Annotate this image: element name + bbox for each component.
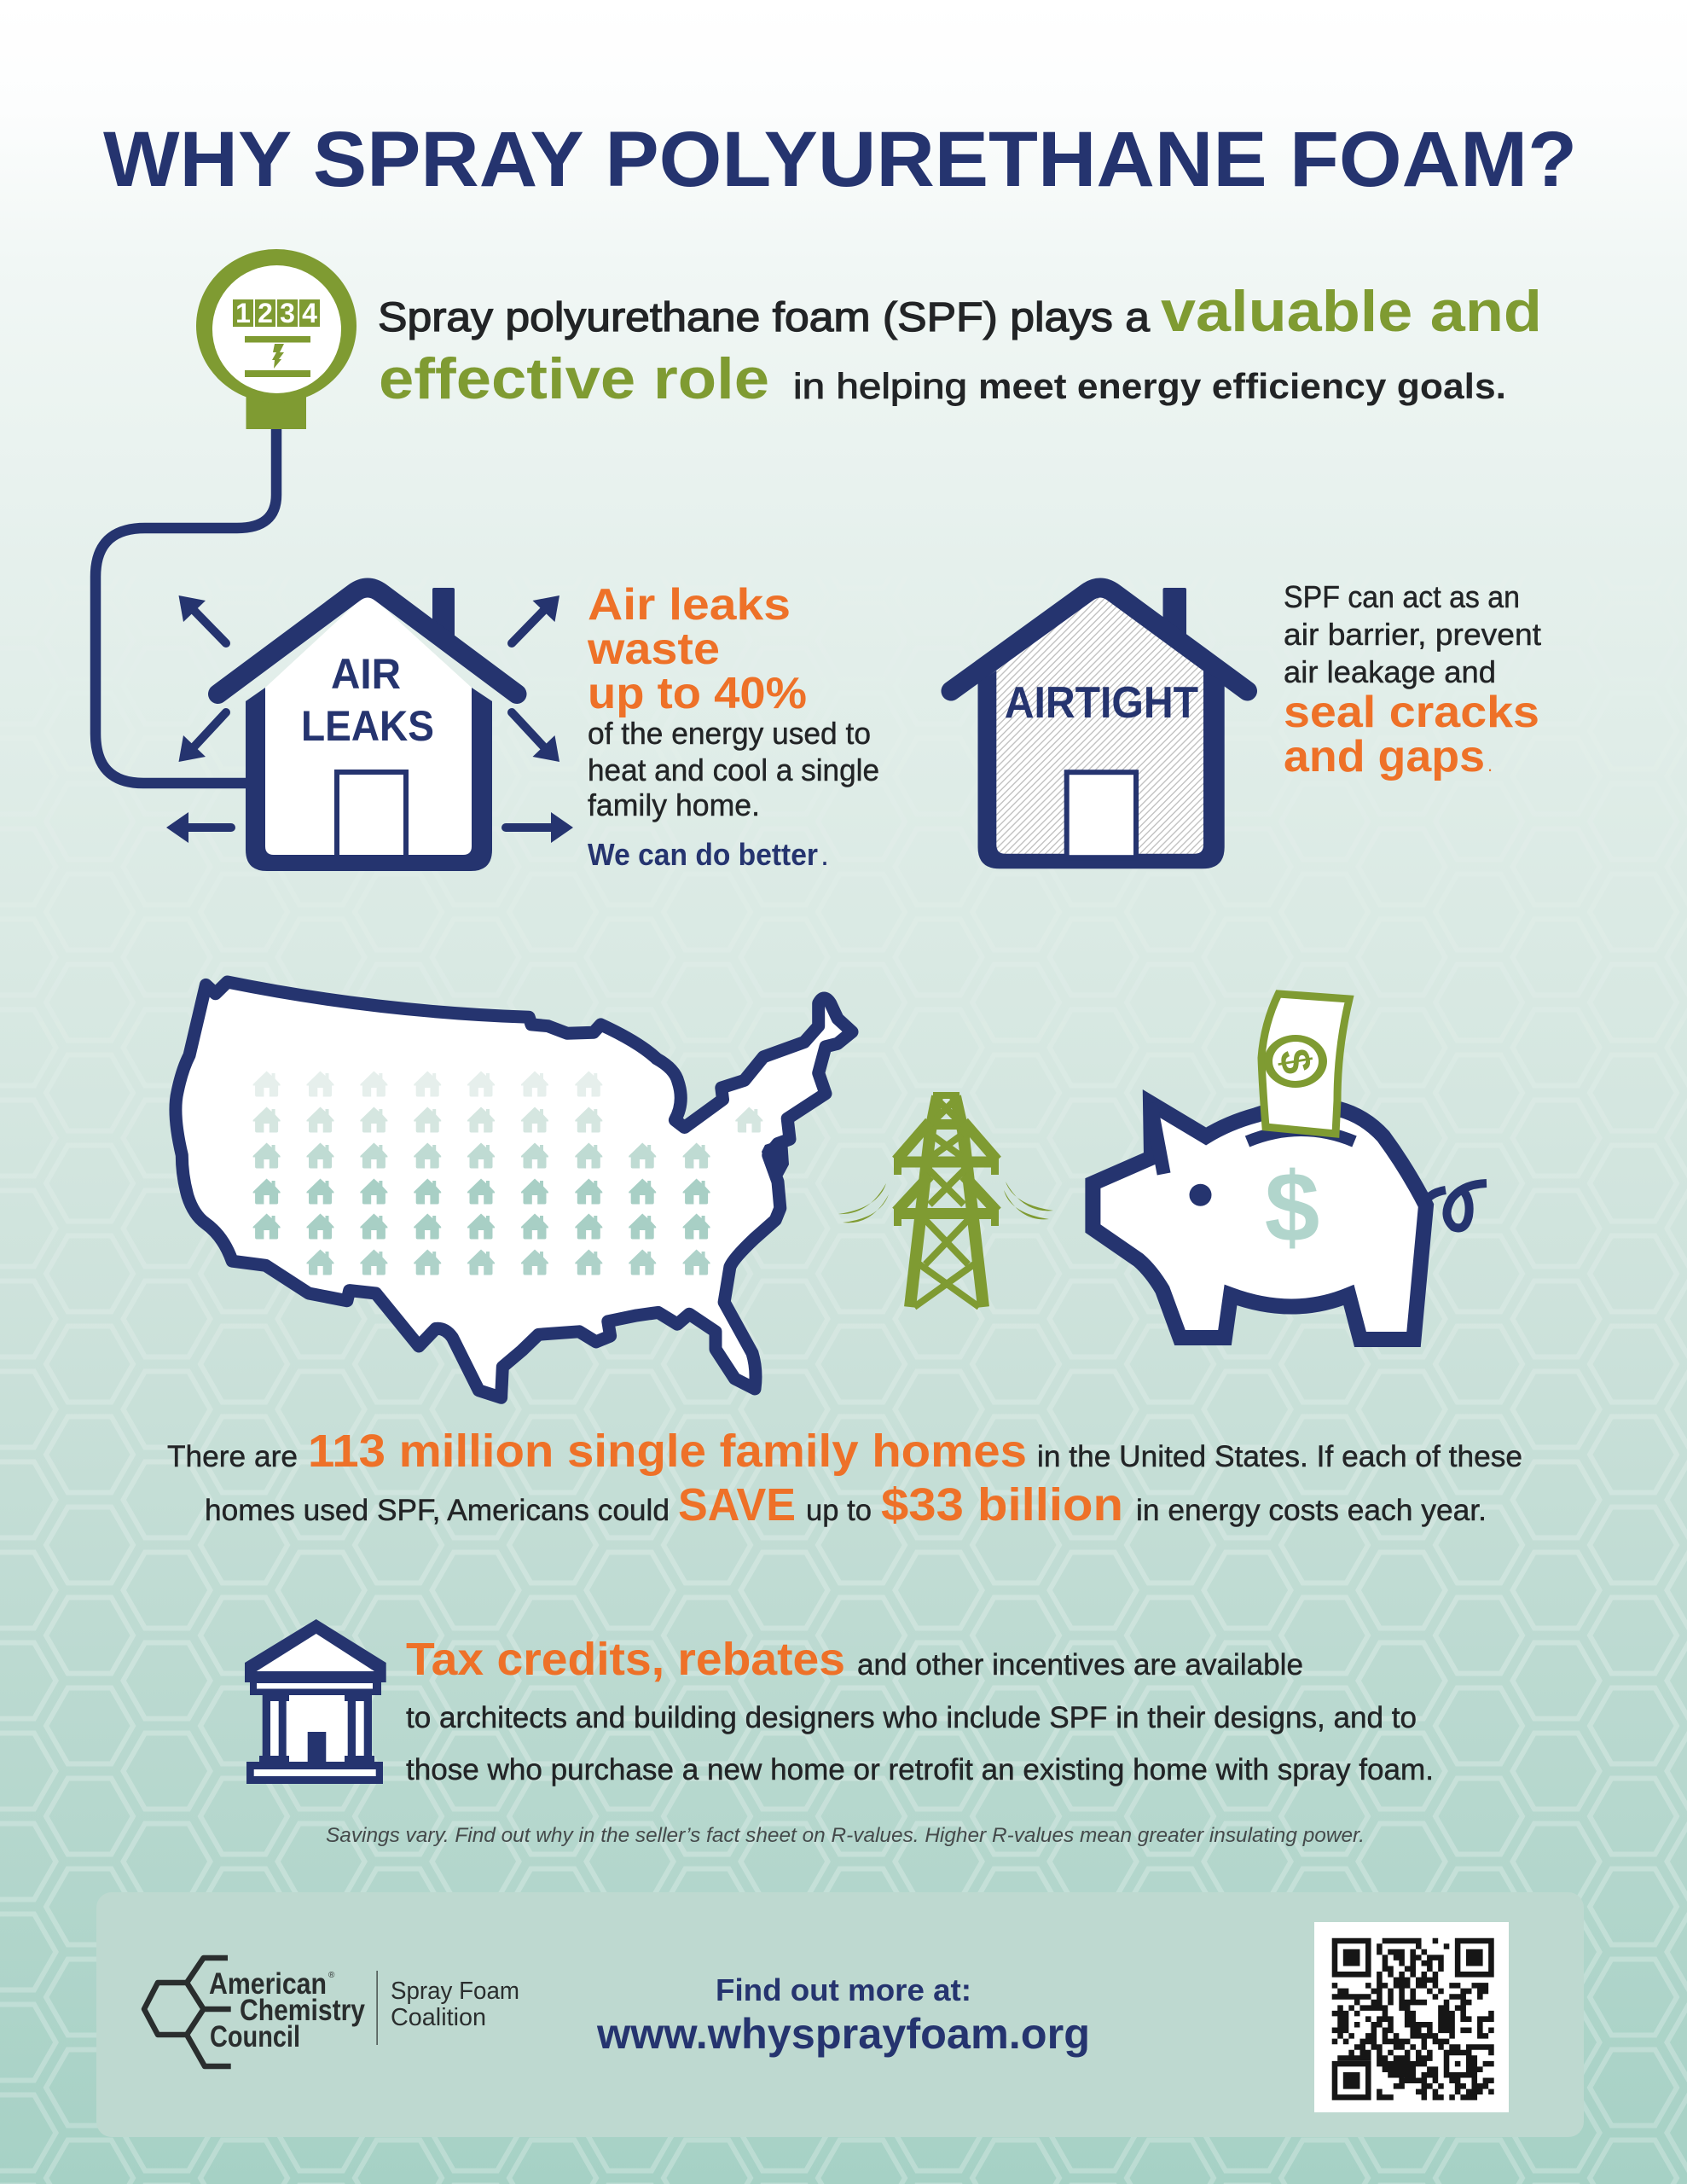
tax credits text: those who purchase a new home or retrofit an existing home with spray foam. — [406, 1753, 1434, 1786]
air leaks text — [587, 580, 879, 872]
homes and savings statement: $33 billion — [881, 1479, 1123, 1531]
air leaks text: We can do better — [588, 837, 818, 872]
homes and savings statement — [167, 1426, 1522, 1531]
airtight text: seal cracks — [1284, 688, 1539, 737]
homes and savings statement: SAVE — [678, 1479, 796, 1531]
website call to action: Find out more at: — [716, 1972, 971, 2007]
panel: footer — [96, 1892, 1584, 2137]
QR code — [1314, 1922, 1509, 2112]
intro text: meet energy efficiency goals. — [978, 366, 1506, 406]
air leaks text: family home. — [588, 787, 760, 822]
homes and savings statement: There are — [167, 1440, 298, 1473]
homes and savings statement: 113 million single family homes — [308, 1426, 1027, 1477]
icon: piggy bank: $ — [1265, 1152, 1319, 1263]
logo: American Chemistry Council: Spray Foam — [391, 1978, 519, 2005]
logo: American Chemistry Council — [144, 1958, 519, 2066]
icon: government building — [245, 1619, 386, 1784]
intro text: valuable and — [1161, 279, 1542, 344]
homes and savings statement: in the United States. If each of these — [1037, 1440, 1522, 1473]
tax credits text: Tax credits, rebates — [406, 1634, 845, 1685]
logo: American Chemistry Council: Coalition — [391, 2004, 486, 2031]
intro text: in helping — [793, 366, 967, 406]
title: WHY SPRAY POLYURETHANE FOAM? — [103, 116, 1577, 203]
logo: American Chemistry Council: Chemistry — [240, 1994, 365, 2027]
icon: electric meter: 3 — [280, 298, 295, 328]
air leaks text: heat and cool a single — [588, 752, 879, 787]
airtight text: . — [1487, 754, 1493, 775]
icon: dollar bill — [1261, 994, 1349, 1134]
icon: airtight house: AIRTIGHT — [1005, 678, 1198, 728]
logo: American Chemistry Council: American — [209, 1967, 327, 2001]
icon: transmission tower — [894, 1092, 999, 1307]
icons: rows of houses on map — [253, 1072, 762, 1275]
intro text — [378, 279, 1542, 411]
airtight text: air leakage and — [1284, 654, 1496, 689]
air leaks text: waste — [587, 624, 720, 674]
map of the United States — [176, 982, 852, 1397]
website call to action — [596, 1972, 1090, 2058]
airtight text: and gaps — [1284, 732, 1485, 781]
icon: cable from meter to house — [96, 429, 276, 783]
tax credits text: to architects and building designers who include SPF in their designs, and to — [406, 1701, 1417, 1734]
icon: air leaks house: AIR — [331, 650, 401, 698]
air leaks text: of the energy used to — [588, 716, 871, 751]
air leaks text: up to 40% — [588, 669, 807, 718]
airtight text: SPF can act as an — [1284, 579, 1520, 614]
icon: electric meter: 2 — [258, 298, 273, 328]
homes and savings statement: up to — [806, 1494, 872, 1527]
icon: dollar bill: $ — [1270, 1045, 1321, 1077]
intro text: effective role — [379, 346, 769, 411]
homes and savings statement: in energy costs each year. — [1136, 1494, 1487, 1527]
icon: piggy bank — [1093, 1103, 1487, 1339]
icon: air leaks house — [218, 588, 517, 871]
homes and savings statement: homes used SPF, Americans could — [205, 1494, 670, 1527]
air leaks text: Air leaks — [588, 580, 791, 630]
background hexagon pattern — [0, 1306, 1687, 2184]
tax credits text: and other incentives are available — [857, 1648, 1303, 1682]
airtight text: air barrier, prevent — [1284, 617, 1541, 652]
icon: electric meter: 1 — [235, 298, 251, 328]
icon: energy wave lines — [838, 1182, 1053, 1223]
icon: airtight house — [951, 588, 1247, 868]
icon: air leaks house: LEAKS — [301, 702, 434, 750]
airtight text — [1284, 579, 1541, 781]
air leaks text: . — [820, 837, 829, 872]
arrows: air escaping — [166, 595, 573, 843]
logo: American Chemistry Council: Council — [210, 2020, 300, 2053]
footnote: Savings vary. Find out why in the seller’s fact sheet on R-values. Higher R-values mean greater insulating power. — [326, 1824, 1365, 1847]
icon: electric meter: 4 — [302, 298, 317, 328]
logo: American Chemistry Council: ® — [328, 1971, 335, 1980]
tax credits text — [406, 1634, 1434, 1786]
website call to action: www.whysprayfoam.org — [596, 2010, 1090, 2058]
icon: electric meter — [196, 249, 357, 429]
intro text: Spray polyurethane foam (SPF) plays a — [378, 295, 1150, 340]
